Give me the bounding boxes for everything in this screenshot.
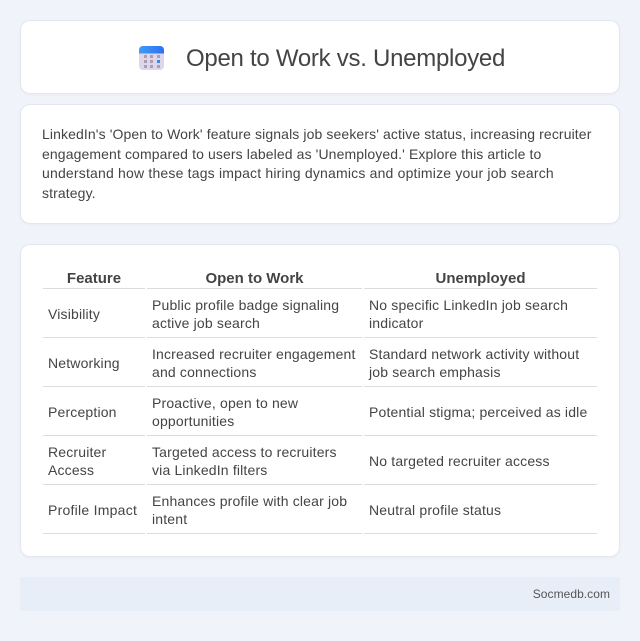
intro text: strategy. (42, 184, 96, 200)
intro text: engagement compared to users labeled as 'Unemployed.' Explore this article to (42, 146, 541, 162)
Networking: Unemployed (368, 346, 580, 380)
Visibility: Open to Work: Public profile badge signaling (152, 297, 339, 313)
Networking: Open to Work: and connections (152, 364, 257, 380)
Visibility: Unemployed: indicator (369, 315, 423, 331)
footer bar (20, 577, 620, 611)
Recruiter Access: Unemployed: No targeted recruiter access (369, 453, 550, 469)
row: Perception: Perception (48, 404, 117, 420)
Perception: Open to Work: Proactive, open to new (152, 395, 298, 411)
Networking: Open to Work: Increased recruiter engagement (152, 346, 356, 362)
header: Unemployed: Unemployed (435, 270, 526, 287)
intro text: understand how these tags impact hiring dynamics and optimize your job search (42, 165, 554, 181)
row: Recruiter Access: Recruiter (48, 444, 106, 460)
Visibility: Unemployed: No specific LinkedIn job search (369, 297, 568, 313)
intro card (20, 104, 620, 224)
header: Feature: Feature (67, 270, 121, 287)
intro text (42, 126, 592, 201)
Recruiter Access: Open to Work: Targeted access to recruiters (152, 444, 337, 460)
Profile Impact: Unemployed: Neutral profile status (369, 502, 501, 518)
Networking: Unemployed: job search emphasis (369, 364, 501, 380)
Perception: Open to Work: opportunities (152, 413, 234, 429)
Profile Impact: Open to Work: Enhances profile with clear job (152, 493, 347, 509)
Networking: Unemployed: Standard network activity without (369, 346, 579, 362)
Recruiter Access: Open to Work (152, 444, 337, 478)
footer credit: Socmedb.com (533, 587, 610, 601)
table card (20, 244, 620, 557)
intro text: LinkedIn's 'Open to Work' feature signals job seekers' active status, increasing recruiter (42, 126, 591, 142)
Perception: Open to Work (152, 395, 298, 429)
Networking: Open to Work (152, 346, 356, 380)
title: Open to Work vs. Unemployed (186, 45, 505, 72)
row: Profile Impact: Profile Impact (48, 502, 137, 518)
Perception: Unemployed: Potential stigma; perceived as idle (369, 404, 587, 420)
row: Recruiter Access (48, 444, 106, 478)
header: Open to Work: Open to Work (205, 270, 304, 287)
Profile Impact: Open to Work: intent (152, 511, 187, 527)
icon: calendar (139, 46, 164, 70)
Visibility: Open to Work (152, 297, 339, 331)
row: Networking: Networking (48, 355, 120, 371)
row: Visibility: Visibility (48, 306, 100, 322)
Profile Impact: Open to Work (152, 493, 347, 527)
Recruiter Access: Open to Work: via LinkedIn filters (152, 462, 267, 478)
Visibility: Unemployed (369, 297, 568, 331)
title card (20, 20, 620, 94)
Visibility: Open to Work: active job search (152, 315, 260, 331)
row: Recruiter Access: Access (48, 462, 94, 478)
